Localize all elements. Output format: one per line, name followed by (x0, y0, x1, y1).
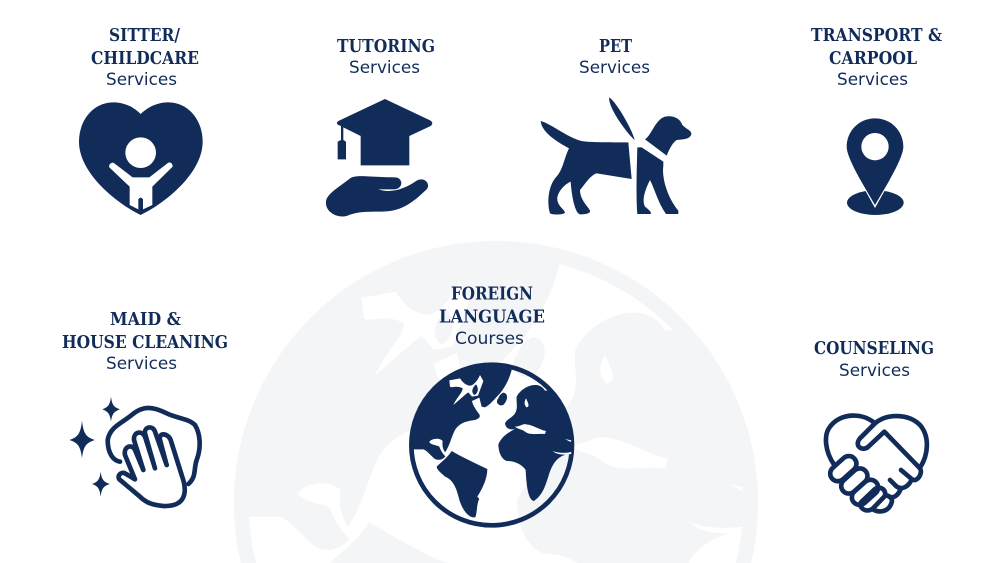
heading: maid and house cleaning: MAID & (110, 309, 181, 330)
heading: foreign language: Courses (455, 329, 524, 349)
heading: foreign language: FOREIGN (451, 284, 533, 304)
heading: sitter childcare (91, 25, 199, 90)
icon: handshake heart (826, 416, 927, 511)
heading: maid and house cleaning (62, 309, 228, 374)
heading: tutoring: Services (349, 58, 420, 78)
heading: foreign language (439, 284, 545, 349)
heading: counseling: COUNSELING (814, 338, 934, 359)
heading: sitter childcare: Services (106, 70, 177, 90)
heading: counseling: Services (839, 361, 910, 381)
heading: tutoring: TUTORING (337, 36, 435, 57)
heading: sitter childcare: CHILDCARE (91, 48, 199, 69)
heading: transport and carpool: Services (837, 70, 908, 90)
heading: transport and carpool: TRANSPORT & (811, 25, 942, 46)
heading: transport and carpool: CARPOOL (829, 48, 917, 69)
heading: tutoring (337, 36, 435, 78)
heading: counseling (814, 338, 934, 381)
icon: map pin (847, 118, 904, 215)
heading: sitter childcare: SITTER/ (109, 25, 180, 46)
heading: maid and house cleaning: Services (106, 354, 177, 374)
icon: heart with child (79, 102, 203, 215)
icon: earth globe (407, 362, 577, 525)
heading: transport and carpool (811, 25, 942, 90)
background globe watermark (226, 239, 766, 563)
icon: graduation cap over hand (326, 99, 432, 216)
icon: cleaning hand with sparkles (69, 397, 200, 506)
heading: maid and house cleaning: HOUSE CLEANING (62, 332, 228, 353)
heading: pet (579, 36, 650, 78)
heading: foreign language: LANGUAGE (439, 306, 545, 328)
heading: pet: Services (579, 58, 650, 78)
icon: guide dog (541, 97, 691, 215)
heading: pet: PET (599, 36, 632, 57)
